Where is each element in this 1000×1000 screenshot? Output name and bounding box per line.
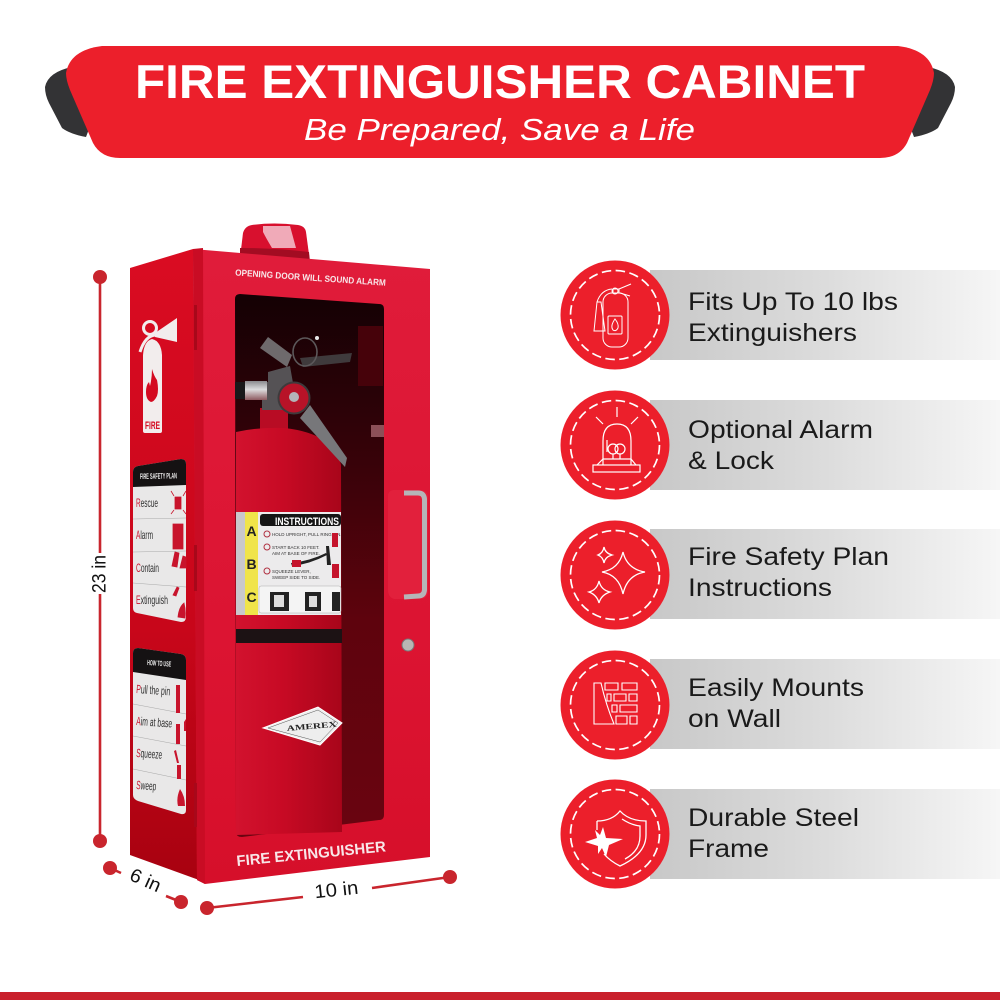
how to use sign: HOW TO USE bbox=[147, 658, 171, 669]
letters ABC: B bbox=[246, 556, 257, 572]
hinges bbox=[194, 305, 197, 827]
feature text bbox=[688, 288, 898, 347]
feature text: & Lock bbox=[688, 447, 775, 475]
feature 2: optional alarm and lock bbox=[560, 390, 1000, 500]
badge bbox=[560, 520, 670, 630]
nozzle fitting bbox=[245, 381, 267, 400]
fire class boxes bbox=[259, 586, 341, 613]
cabinet side panel bbox=[130, 249, 199, 880]
row dividers bbox=[133, 704, 186, 780]
label left strip bbox=[236, 512, 245, 615]
sign header bbox=[133, 648, 186, 680]
banner dark end left bbox=[45, 67, 100, 137]
feature text: Frame bbox=[688, 835, 769, 863]
feature text: on Wall bbox=[688, 705, 781, 733]
cabinet front panel bbox=[193, 249, 430, 884]
use rows: Squeeze bbox=[136, 746, 163, 762]
feature text: Optional Alarm bbox=[688, 416, 873, 444]
door top text: OPENING DOOR WILL SOUND ALARM bbox=[235, 268, 386, 288]
fire safety plan sign bbox=[133, 459, 186, 622]
instruction steps: SWEEP SIDE TO SIDE. bbox=[272, 575, 320, 580]
interior tag bbox=[371, 425, 384, 437]
instruction steps: AIM AT BASE OF FIRE. bbox=[272, 551, 320, 556]
feature 3: fire safety plan instructions bbox=[560, 520, 1000, 630]
grey band bbox=[650, 400, 1000, 490]
feature text bbox=[688, 804, 859, 863]
plan rows: Contain bbox=[136, 561, 159, 575]
instruction steps bbox=[272, 532, 342, 580]
dimension: depth 6 in: 6 in bbox=[126, 865, 164, 897]
icon: alarm beacon bbox=[593, 407, 640, 472]
feature text: Easily Mounts bbox=[688, 674, 864, 702]
subtitle: Be Prepared, Save a Life bbox=[304, 112, 695, 147]
feature text bbox=[688, 416, 873, 475]
hose bbox=[235, 382, 246, 399]
instruction label bbox=[236, 512, 341, 615]
badge bbox=[560, 780, 670, 888]
door handle bbox=[388, 490, 428, 599]
neck bbox=[260, 408, 288, 430]
use rows: Sweep bbox=[136, 778, 157, 793]
dimension: width 10 in bbox=[200, 870, 457, 915]
icon: extinguisher bbox=[594, 284, 631, 347]
feature text: Fire Safety Plan bbox=[688, 543, 889, 571]
feature text: Instructions bbox=[688, 574, 832, 602]
handle bbox=[300, 353, 352, 367]
plan rows: Rescue bbox=[136, 496, 158, 510]
icon: brick wall bbox=[594, 683, 637, 724]
grey band bbox=[650, 659, 1000, 749]
dimension: width 10 in: 10 in bbox=[313, 878, 359, 903]
side fire extinguisher sign bbox=[140, 318, 177, 433]
valve body bbox=[262, 366, 296, 410]
door bottom text: FIRE EXTINGUISHER bbox=[236, 838, 387, 870]
pull ring bbox=[293, 338, 317, 366]
lower lever bbox=[300, 405, 347, 467]
badge bbox=[560, 650, 670, 760]
plan rows: Alarm bbox=[136, 528, 153, 542]
badge bbox=[560, 260, 670, 370]
feature text: Fits Up To 10 lbs bbox=[688, 288, 898, 316]
feature text bbox=[688, 543, 889, 602]
instruction steps: SQUEEZE LEVER, bbox=[272, 569, 311, 574]
fire extinguisher cabinet bbox=[130, 224, 430, 884]
banner dark end right bbox=[900, 67, 955, 137]
extinguisher bbox=[235, 336, 352, 835]
instruction steps: START BACK 10 FEET. bbox=[272, 545, 320, 550]
letters ABC: C bbox=[246, 589, 257, 605]
side fire extinguisher sign: FIRE bbox=[145, 420, 160, 432]
dimension: height 23 in bbox=[90, 270, 110, 848]
Amerex diamond logo bbox=[263, 707, 342, 745]
use rows bbox=[136, 682, 173, 793]
how to use sign bbox=[133, 648, 186, 814]
grey band bbox=[650, 270, 1000, 360]
window interior bbox=[235, 294, 384, 837]
feature text bbox=[688, 674, 864, 733]
door hinge strip bbox=[193, 248, 205, 884]
feature 5: durable steel frame bbox=[560, 780, 1000, 888]
instruction header bbox=[260, 514, 341, 526]
extinguisher: INSTRUCTIONS bbox=[275, 516, 339, 528]
ring highlight bbox=[315, 336, 319, 340]
figure pictogram bbox=[291, 546, 331, 566]
label yellow hazard strip bbox=[245, 512, 258, 615]
letters ABC: A bbox=[246, 523, 257, 539]
interior bracket bbox=[358, 326, 383, 386]
feature text: Durable Steel bbox=[688, 804, 859, 832]
use icons bbox=[174, 685, 186, 806]
header banner bbox=[45, 46, 955, 158]
icon: sparkles bbox=[589, 547, 645, 603]
cylinder shoulder and body bbox=[236, 428, 342, 835]
upper lever bbox=[260, 337, 292, 367]
row dividers bbox=[133, 518, 186, 587]
fire safety plan sign: FIRE SAFETY PLAN bbox=[140, 471, 177, 481]
plan rows: Extinguish bbox=[136, 593, 168, 607]
banner red ribbon bbox=[66, 46, 934, 158]
title: FIRE EXTINGUISHER CABINET bbox=[135, 55, 865, 108]
gauge bbox=[278, 382, 310, 414]
use rows: Aim at base bbox=[136, 714, 173, 731]
instruction steps: HOLD UPRIGHT, PULL RING PIN. bbox=[272, 532, 342, 537]
step numbers bbox=[264, 531, 270, 574]
black band bbox=[236, 629, 342, 643]
feature text: Extinguishers bbox=[688, 319, 857, 347]
dimension: height 23 in: 23 in bbox=[90, 555, 110, 593]
icon: shield with spark bbox=[585, 811, 646, 866]
sign header bbox=[133, 459, 186, 487]
dimension: depth 6 in bbox=[103, 861, 188, 909]
feature 4: easily mounts on wall bbox=[560, 650, 1000, 760]
feature 1: fits up to 10 lbs bbox=[560, 260, 1000, 370]
badge bbox=[560, 390, 670, 500]
bottom bar bbox=[0, 992, 1000, 1000]
grey band bbox=[650, 789, 1000, 879]
plan icons bbox=[171, 491, 186, 618]
door lock bbox=[402, 639, 414, 651]
use rows: Pull the pin bbox=[136, 682, 171, 698]
extinguisher: AMEREX bbox=[286, 720, 337, 733]
alarm beacon bbox=[240, 224, 310, 262]
letters ABC bbox=[246, 523, 257, 605]
plan rows bbox=[136, 496, 168, 607]
grey band bbox=[650, 529, 1000, 619]
